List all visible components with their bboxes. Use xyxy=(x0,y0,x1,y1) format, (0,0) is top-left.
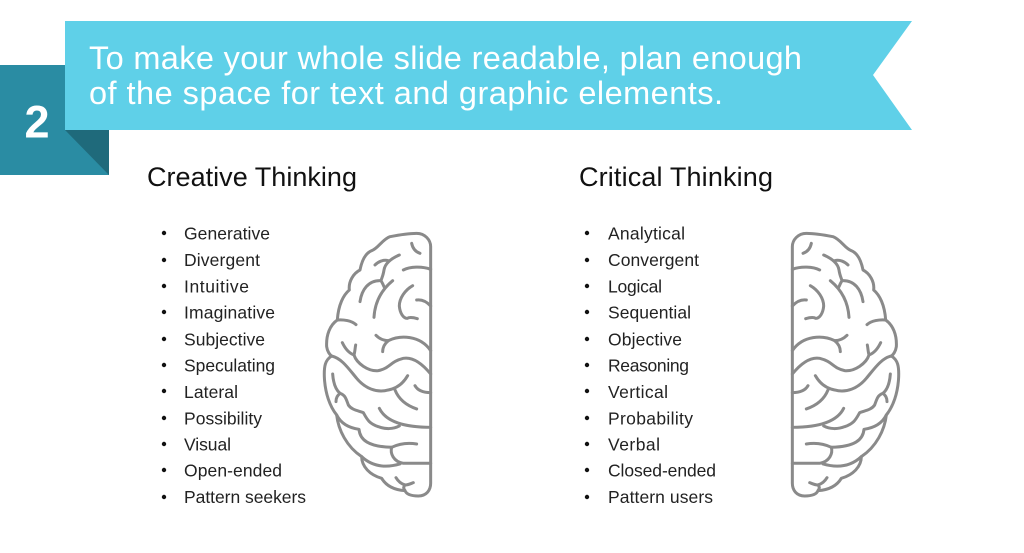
list: creative traits xyxy=(162,224,306,507)
number 2: 2 xyxy=(24,96,50,148)
list: creative traits: Divergent xyxy=(184,250,260,270)
list: creative traits: Possibility xyxy=(184,408,262,428)
panel: critical thinking xyxy=(579,162,899,507)
list: creative traits: Open-ended xyxy=(184,460,282,480)
panel: creative thinking xyxy=(147,162,431,507)
list: critical traits: Objective xyxy=(608,330,682,350)
list: creative traits: Imaginative xyxy=(184,302,275,322)
list: critical traits: Logical xyxy=(608,276,662,296)
list: critical traits xyxy=(585,224,716,507)
list: critical traits: Verbal xyxy=(608,434,660,454)
banner text: To make your whole slide readable, plan enough xyxy=(89,40,802,76)
list: critical traits: Sequential xyxy=(608,302,691,322)
heading: creative thinking: Creative Thinking xyxy=(147,162,357,192)
list: creative traits: Intuitive xyxy=(184,276,249,296)
list: creative traits: Subjective xyxy=(184,330,265,350)
banner text xyxy=(89,40,802,111)
list: critical traits: Reasoning xyxy=(608,356,689,376)
list: critical traits: Analytical xyxy=(608,224,685,244)
list: creative traits: Visual xyxy=(184,434,231,454)
list: creative traits: Pattern seekers xyxy=(184,487,306,507)
banner text: of the space for text and graphic elements. xyxy=(89,75,723,111)
banner xyxy=(65,21,912,130)
list: critical traits: Closed-ended xyxy=(608,460,716,480)
list: critical traits: Probability xyxy=(608,408,693,428)
heading: critical thinking: Critical Thinking xyxy=(579,162,773,192)
list: creative traits: Lateral xyxy=(184,382,238,402)
number badge xyxy=(0,65,109,175)
list: critical traits: Vertical xyxy=(608,382,668,402)
icon: right brain xyxy=(792,233,899,496)
list: critical traits: Pattern users xyxy=(608,487,713,507)
list: critical traits: Convergent xyxy=(608,250,699,270)
icon: left brain xyxy=(324,233,431,496)
list: creative traits: Generative xyxy=(184,224,270,244)
list: creative traits: Speculating xyxy=(184,356,275,376)
